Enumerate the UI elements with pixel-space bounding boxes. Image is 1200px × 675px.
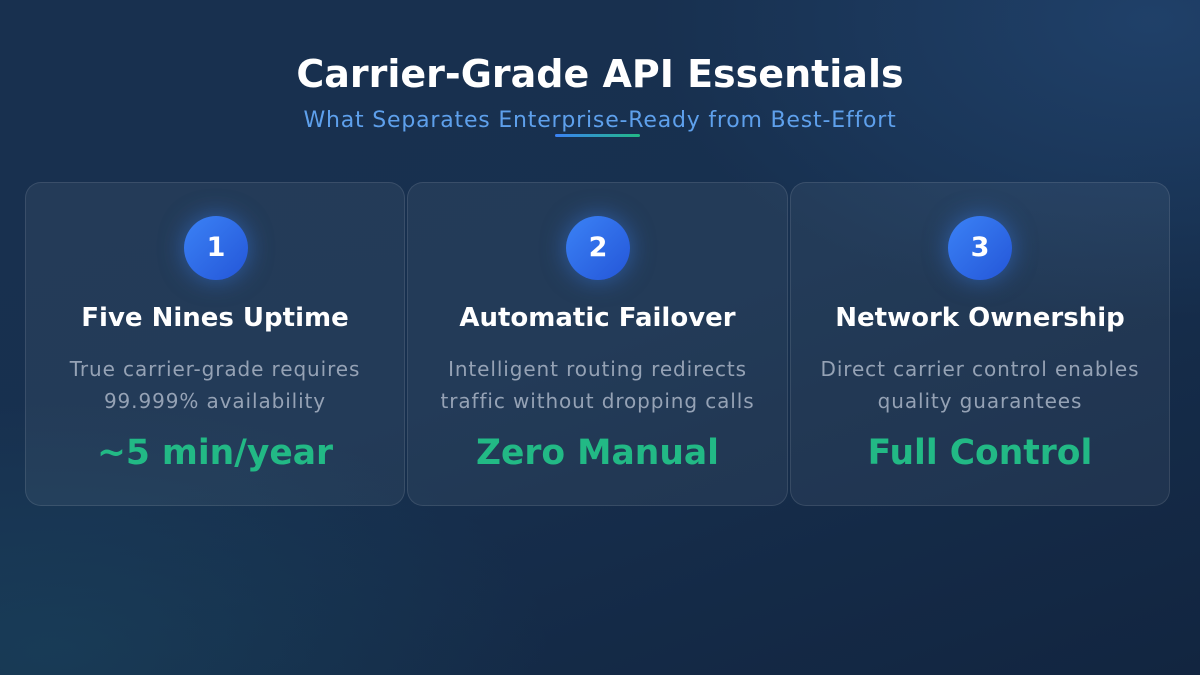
icon: number 2: 2 [589,232,607,263]
description: traffic without dropping calls [440,389,755,413]
title: Carrier-Grade API Essentials [296,52,904,96]
description [70,357,360,413]
description: Direct carrier control enables [821,357,1139,381]
stat: Zero Manual [476,433,719,473]
heading: Five Nines Uptime [81,303,349,333]
panel: network ownership [790,182,1170,506]
panel: automatic failover [407,182,788,506]
description [440,357,755,413]
underline accent [555,134,640,137]
subtitle: What Separates Enterprise-Ready from Best-Effort [303,108,897,133]
description: 99.999% availability [104,389,326,413]
icon: number 3 [948,216,1012,280]
icon: number 3: 3 [971,232,989,263]
panel: five nines uptime [25,182,405,506]
icon: number 2 [566,216,630,280]
icon: number 1 [184,216,248,280]
description: Intelligent routing redirects [448,357,747,381]
stat: Full Control [868,433,1092,473]
stat: ~5 min/year [97,433,333,473]
description [821,357,1139,413]
description: True carrier-grade requires [70,357,360,381]
heading: Network Ownership [835,303,1125,333]
heading: Automatic Failover [459,303,736,333]
icon: number 1: 1 [207,232,225,263]
description: quality guarantees [878,389,1082,413]
